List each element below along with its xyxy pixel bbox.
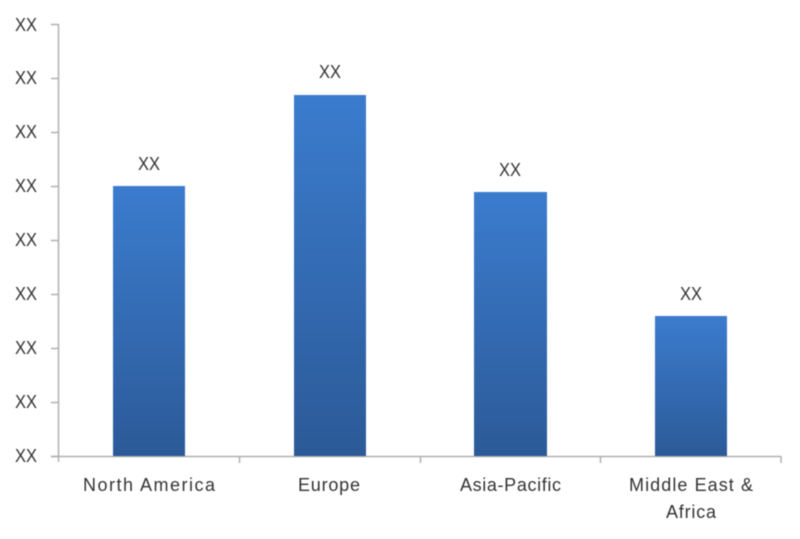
y axis labels: XX xyxy=(15,392,37,412)
bar: North America xyxy=(113,154,185,456)
category label: Middle East & Africa: Middle East & xyxy=(629,475,753,495)
category label: Europe: Europe xyxy=(298,475,360,495)
bar: Europe xyxy=(294,62,366,456)
y axis labels: XX xyxy=(15,176,37,196)
value label: Asia-Pacific: XX xyxy=(499,160,521,180)
y axis labels: XX xyxy=(15,122,37,142)
x axis xyxy=(51,456,781,463)
y axis labels: XX xyxy=(15,68,37,88)
y axis labels: XX xyxy=(15,230,37,250)
y axis labels: XX xyxy=(15,15,37,35)
y axis labels: XX xyxy=(15,446,37,466)
category label: Middle East & Africa: Africa xyxy=(666,502,717,522)
value label: North America: XX xyxy=(138,154,160,174)
category label: North America: North America xyxy=(83,475,216,495)
bar: Asia-Pacific xyxy=(474,160,547,456)
category label: Asia-Pacific: Asia-Pacific xyxy=(460,475,561,495)
category label: Middle East & Africa xyxy=(629,475,753,522)
value label: Middle East & Africa: XX xyxy=(680,284,702,304)
y axis labels xyxy=(15,15,37,466)
y axis labels: XX xyxy=(15,284,37,304)
bar: Middle East & Africa xyxy=(655,284,727,456)
y axis labels: XX xyxy=(15,338,37,358)
y axis xyxy=(15,15,58,466)
value label: Europe: XX xyxy=(319,62,341,82)
